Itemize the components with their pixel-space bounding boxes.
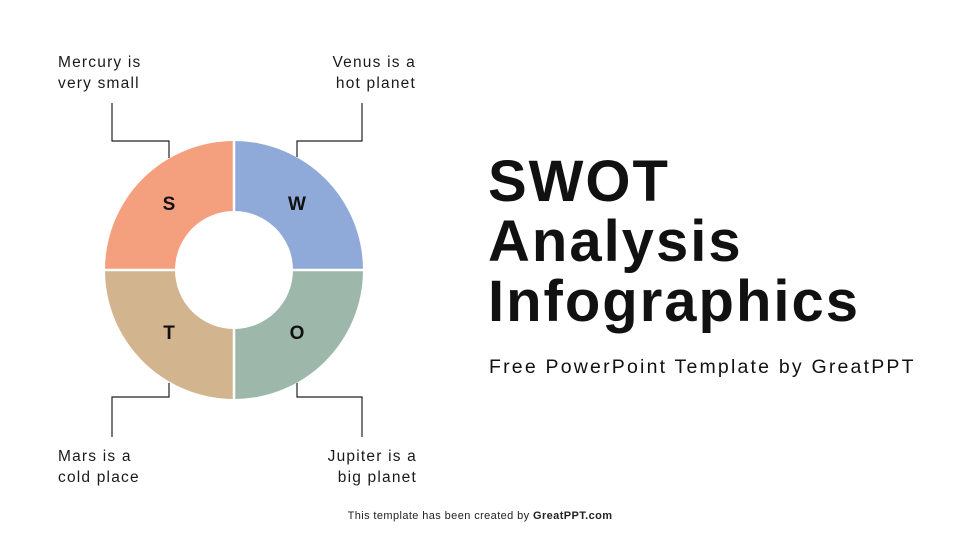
title: SWOT (488, 149, 670, 214)
label: Venus (332, 54, 416, 92)
label: Mercury (58, 54, 141, 92)
subtitle: Free PowerPoint Template by GreatPPT (489, 356, 916, 378)
connector lines (112, 103, 362, 437)
title (488, 149, 860, 334)
label: Mercury: very small (58, 75, 140, 92)
segment S: S (163, 194, 175, 215)
segment S (105, 141, 234, 270)
label: Venus: hot planet (336, 75, 416, 92)
segment T: T (163, 323, 175, 344)
label: Jupiter: Jupiter is a (328, 448, 417, 465)
segment W: W (288, 194, 306, 215)
footer: This template has been created by GreatPPT.com (348, 510, 612, 522)
label: Jupiter (328, 448, 417, 486)
label: Venus: Venus is a (332, 54, 416, 71)
label: Mars: Mars is a (58, 448, 132, 465)
label: Mars: cold place (58, 469, 140, 486)
label: Mercury: Mercury is (58, 54, 141, 71)
title: Analysis (488, 209, 743, 274)
segment T (105, 270, 234, 399)
label: Jupiter: big planet (338, 469, 417, 486)
segment W (234, 141, 363, 270)
segment O (234, 270, 363, 399)
segment O: O (290, 323, 304, 344)
title: Infographics (488, 269, 860, 334)
label: Mars (58, 448, 140, 486)
